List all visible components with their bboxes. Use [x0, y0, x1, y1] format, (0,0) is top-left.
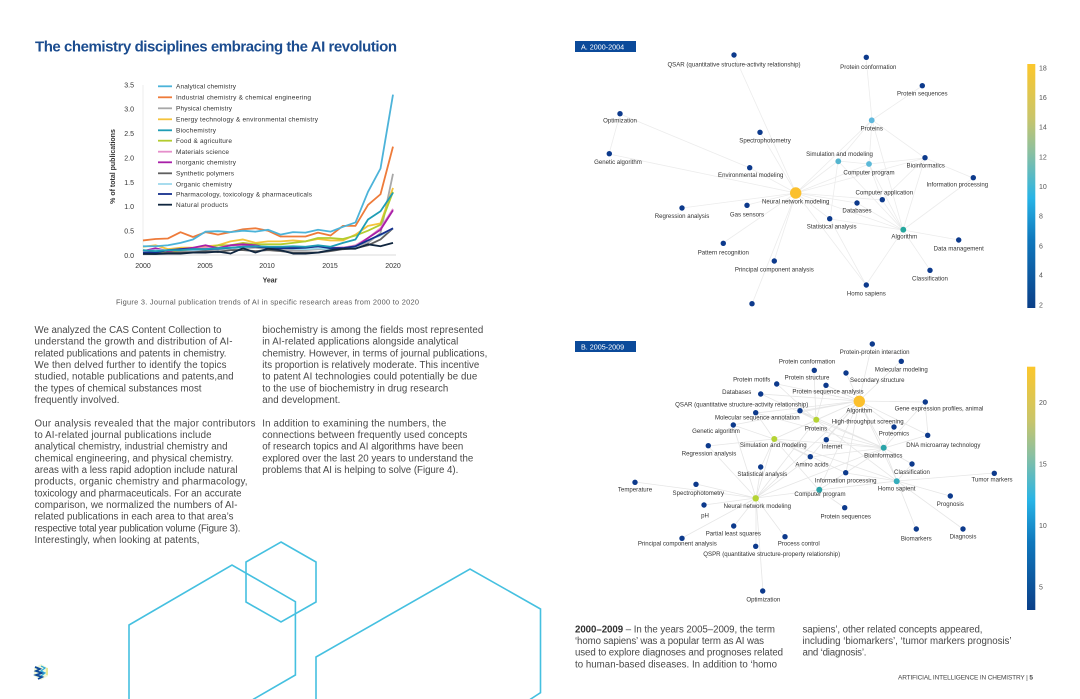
chart axes: 2.5: [124, 131, 134, 138]
colour bar B: [1027, 367, 1047, 610]
network B labels: Amino acids: [795, 461, 829, 468]
body text: right column: [262, 325, 487, 476]
body text: left column: We analyzed the CAS Content Collection to: [34, 325, 222, 336]
network B labels: Molecular modeling: [875, 366, 928, 373]
network B labels: Proteomics: [879, 430, 909, 437]
colour bar A: [1027, 64, 1047, 310]
network B labels: Protein-protein interaction: [840, 349, 910, 356]
body text: left column: We then delved further to identify the topics: [34, 360, 227, 371]
body text: left column: chemical engineering, and physical chemistry.: [34, 453, 234, 464]
title: The chemistry disciplines embracing the AI revolution: [35, 38, 397, 56]
chart legend: Analytical chemistry: [176, 84, 237, 91]
network A labels: Simulation and modeling: [806, 151, 873, 158]
body text: left column: respective total year publication volume (Figure 3).: [34, 523, 240, 534]
network A labels: Classification: [912, 276, 948, 283]
chart legend: Natural products: [176, 202, 229, 209]
network B labels: [618, 349, 1013, 604]
body text: left column: related publications in each area to that area’s: [34, 512, 234, 523]
footer: running title and page number: ARTIFICIAL INTELLIGENCE IN CHEMISTRY | 5: [898, 674, 1033, 681]
colour bar A: 12: [1039, 154, 1047, 162]
network B labels: Classification: [894, 469, 930, 476]
network A labels: Pattern recognition: [698, 249, 749, 256]
chart legend: Physical chemistry: [176, 106, 233, 113]
chart axes: 0.5: [124, 228, 134, 236]
network B nodes: [632, 341, 997, 594]
badge B: B. 2005-2009: [581, 342, 624, 351]
body text: left column: toxicology and pharmaceuticals. For an accurate: [34, 488, 242, 499]
network B labels: QSPR (quantitative structure-property relationship): [703, 551, 840, 558]
colour bar A: 10: [1039, 184, 1047, 191]
body text: right column: of research topics and AI algorithms have been: [262, 442, 463, 453]
decorative hexagon outlines: [129, 542, 540, 699]
body text: right column: connections between frequently used concepts: [262, 430, 467, 441]
body text: right column: to patent AI technologies could potentially be due: [262, 372, 477, 383]
network B labels: Spectrophotometry: [673, 490, 725, 497]
body text: right column: to the use of biochemistry in drug research: [262, 383, 448, 394]
chart axes: 1.5: [124, 180, 134, 187]
network A labels: Neural network modeling: [762, 198, 829, 205]
text block: 2000-2009 summary left: 2000–2009 – In the years 2005–2009, the term: [575, 624, 775, 636]
chart axes: [110, 82, 401, 284]
network B labels: Protein structure: [785, 375, 830, 382]
colour bar B: 15: [1039, 462, 1047, 468]
chart axes: % of total publications: [110, 129, 117, 204]
body text: right column: and development.: [262, 395, 340, 406]
network B labels: DNA microarray technology: [906, 442, 981, 449]
network B labels: High-throughput screening: [832, 418, 904, 425]
network A labels: [594, 61, 988, 297]
network A labels: Homo sapiens: [847, 290, 886, 297]
body text: left column: Our analysis revealed that the major contributors: [34, 418, 256, 429]
text block: 2000-2009 summary right: sapiens’, other related concepts appeared,: [802, 624, 982, 636]
network A labels: Genetic algorithm: [594, 159, 642, 166]
chart axes: 2005: [197, 263, 213, 270]
badge A: A. 2000-2004: [581, 42, 624, 51]
network B labels: Diagnosis: [950, 534, 976, 541]
network B labels: Computer program: [794, 491, 846, 498]
network A labels: Information processing: [926, 182, 988, 189]
chart axes: 1.0: [124, 204, 134, 211]
network B labels: Neural network modeling: [724, 503, 791, 510]
body text: left column: to AI-related journal publications include: [34, 430, 212, 441]
network B labels: Internet: [822, 443, 843, 450]
network A edges: [609, 55, 973, 304]
body text: left column: understand the growth and distribution of AI-: [34, 337, 232, 348]
body text: right column: its proportion is relatively moderate. This incentive: [262, 360, 479, 371]
network B labels: Temperature: [618, 487, 653, 494]
network A labels: Proteins: [861, 126, 883, 133]
body text: right column: in AI-related applications alongside analytical: [262, 337, 458, 348]
network B labels: Information processing: [815, 477, 877, 484]
colour bar A: 16: [1039, 95, 1047, 102]
network B labels: Molecular sequence annotation: [715, 415, 800, 422]
text block: 2000-2009 summary left: used to explore diagnoses and prognoses related: [575, 648, 783, 658]
chart legend: Organic chemistry: [176, 181, 233, 188]
body text: left column: studied, notable publications and patents,and: [34, 372, 234, 383]
body text: right column: problems that AI is helping to solve (Figure 4).: [262, 465, 458, 476]
text block: 2000-2009 summary left: [575, 624, 783, 670]
network A labels: Bioinformatics: [907, 162, 945, 169]
network B labels: Proteins: [805, 426, 827, 433]
network A labels: Data management: [934, 246, 984, 253]
badge A: [575, 41, 636, 52]
body text: left column: Interestingly, when looking at patents,: [34, 535, 200, 546]
colour bar B: 10: [1039, 523, 1047, 530]
network A labels: Spectrophotometry: [739, 137, 792, 144]
network B labels: Gene expression profiles, animal: [895, 405, 983, 412]
colour bar A: 6: [1039, 244, 1043, 250]
chart axes: 2.0: [124, 156, 134, 162]
text block: 2000-2009 summary right: [802, 624, 1012, 658]
chart legend: Industrial chemistry & chemical engineering: [176, 95, 311, 102]
body text: left column: analytical chemistry, industrial chemistry and: [34, 442, 228, 453]
network B labels: Principal component analysis: [638, 541, 717, 548]
chart axes: 2015: [322, 263, 338, 270]
icon: CAS logo: [34, 664, 48, 680]
colour bar A: 18: [1039, 66, 1047, 72]
network A labels: Optimization: [603, 117, 637, 124]
network B labels: Simulation and modeling: [740, 442, 807, 449]
body text: left column: areas with a less rapid adoption include natural: [34, 465, 238, 476]
text block: 2000-2009 summary left: to human-based diseases. In addition to ‘homo: [575, 659, 777, 670]
colour bar A: 14: [1039, 124, 1047, 132]
chart legend: Energy technology & environmental chemistry: [176, 117, 319, 124]
network B labels: QSAR (quantitative structure-activity relationship): [675, 402, 808, 409]
chart axes: 3.0: [124, 106, 134, 114]
chart legend: Pharmacology, toxicology & pharmaceuticals: [176, 191, 313, 198]
body text: left column: [34, 325, 256, 546]
network A labels: Protein sequences: [897, 91, 948, 98]
chart legend: [158, 84, 319, 209]
network A labels: Databases: [842, 207, 872, 214]
network A labels: Protein conformation: [840, 64, 896, 71]
body text: left column: the types of chemical substances most: [34, 383, 202, 394]
line chart: journal publication trends: [110, 82, 401, 284]
figure caption: Figure 3. Journal publication trends of AI in specific research areas from 2000 to 2020: [116, 298, 419, 306]
network B labels: Protein conformation: [779, 359, 835, 366]
colour bar A: 4: [1039, 272, 1043, 280]
network B labels: pH: [701, 512, 709, 519]
body text: left column: frequently involved.: [34, 395, 120, 406]
chart axes: 2000: [135, 263, 151, 270]
network A labels: Computer application: [856, 190, 913, 197]
chart axes: 0.0: [124, 253, 134, 260]
network A labels: Gas sensors: [730, 211, 764, 218]
network B edges: [635, 344, 994, 591]
network A labels: Computer program: [843, 170, 895, 177]
network A labels: Principal component analysis: [735, 266, 814, 273]
colour bar B: 20: [1039, 400, 1047, 407]
network B labels: Secondary structure: [850, 377, 905, 384]
body text: left column: comparison, we normalized the numbers of AI-: [34, 500, 238, 511]
network B labels: Optimization: [746, 597, 780, 604]
chart axes: Year: [263, 278, 278, 284]
chart axes: 2010: [259, 263, 275, 270]
panel: network B 2005-2009: [575, 341, 1047, 610]
network B labels: Protein sequences: [820, 514, 871, 521]
badge B: [575, 341, 636, 352]
network B labels: Biomarkers: [901, 535, 932, 542]
network B labels: Partial least squares: [706, 530, 761, 537]
network B labels: Prognosis: [937, 501, 964, 508]
network B labels: Databases: [722, 389, 751, 396]
network B labels: Protein motifs: [733, 376, 770, 383]
chart data lines: [143, 95, 393, 254]
body text: left column: products, organic chemistry and pharmacology,: [34, 477, 248, 488]
chart axes: 2020: [385, 263, 401, 270]
colour bar B: 5: [1039, 584, 1043, 592]
network A nodes: [607, 52, 976, 306]
network B labels: Statistical analysis: [737, 471, 787, 478]
chart legend: Food & agriculture: [176, 138, 232, 145]
network A labels: Statistical analysis: [807, 223, 857, 230]
network B labels: Bioinformatics: [864, 452, 902, 459]
network A labels: Environmental modeling: [718, 172, 783, 179]
text block: 2000-2009 summary right: and ‘diagnosis’.: [802, 648, 866, 658]
chart legend: Synthetic polymers: [176, 171, 235, 178]
body text: right column: explored over the last 20 years to understand the: [262, 453, 473, 464]
colour bar A: 8: [1039, 214, 1043, 220]
network B labels: Tumor markers: [971, 476, 1013, 483]
network A labels: Regression analysis: [655, 213, 709, 220]
body text: right column: biochemistry is among the fields most represented: [262, 325, 483, 336]
chart legend: Inorganic chemistry: [176, 160, 237, 167]
network B labels: Protein sequence analysis: [792, 388, 864, 395]
network B labels: Regression analysis: [682, 450, 736, 457]
network B labels: Genetic algorithm: [692, 428, 740, 435]
body text: right column: chemistry. However, in terms of journal publications,: [262, 348, 487, 359]
chart legend: Biochemistry: [176, 128, 217, 135]
network B labels: Process control: [778, 540, 820, 547]
network A labels: Algorithm: [891, 234, 917, 241]
text block: 2000-2009 summary left: ‘homo sapiens’ was a popular term as AI was: [575, 636, 764, 647]
body text: left column: related publications and patents in chemistry.: [34, 348, 226, 359]
panel: network A 2000-2004: [575, 41, 1047, 310]
body text: right column: In addition to examining the numbers, the: [262, 418, 446, 429]
colour bar A: 2: [1039, 302, 1043, 310]
network B labels: Algorithm: [846, 408, 872, 415]
chart axes: 3.5: [124, 82, 134, 90]
chart legend: Materials science: [176, 149, 229, 156]
text block: 2000-2009 summary right: including ‘biomarkers’, ‘tumor markers prognosis’: [802, 636, 1012, 647]
network B labels: Homo sapient: [878, 485, 916, 492]
network A labels: QSAR (quantitative structure-activity relationship): [667, 61, 801, 68]
